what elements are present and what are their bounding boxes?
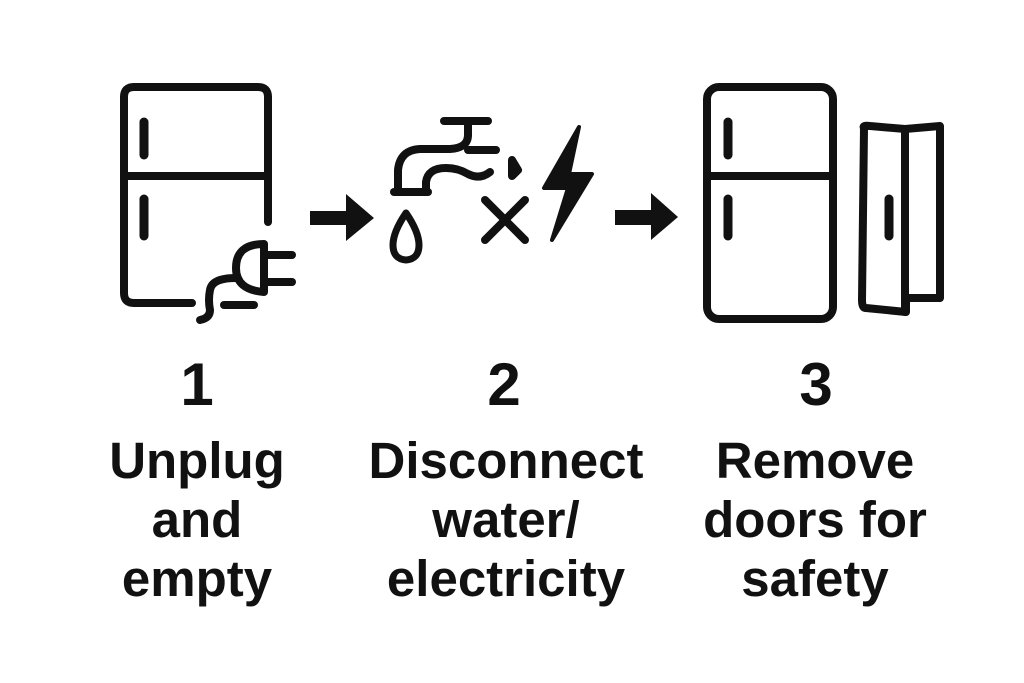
label 2 [369,432,643,607]
label 2: water/ [432,491,580,548]
arrow 1 [310,194,374,241]
icon: fridge with plug [124,87,292,320]
label 1 [109,432,285,607]
number 2: 2 [487,351,521,418]
number 1: 1 [180,351,214,418]
number 3: 3 [799,351,833,418]
label 3 [703,432,927,607]
label 1: empty [122,550,272,607]
arrow 2 [615,193,678,240]
label 3: Remove [716,432,914,489]
label 2: electricity [387,550,625,607]
label 2: Disconnect [369,432,643,489]
label 1: and [152,491,242,548]
label 3: doors for [703,491,927,548]
label 1: Unplug [109,432,285,489]
label 3: safety [741,550,889,607]
icon: tap, drop, cross, lightning [393,121,592,260]
icon: fridge and removed door [707,87,940,319]
